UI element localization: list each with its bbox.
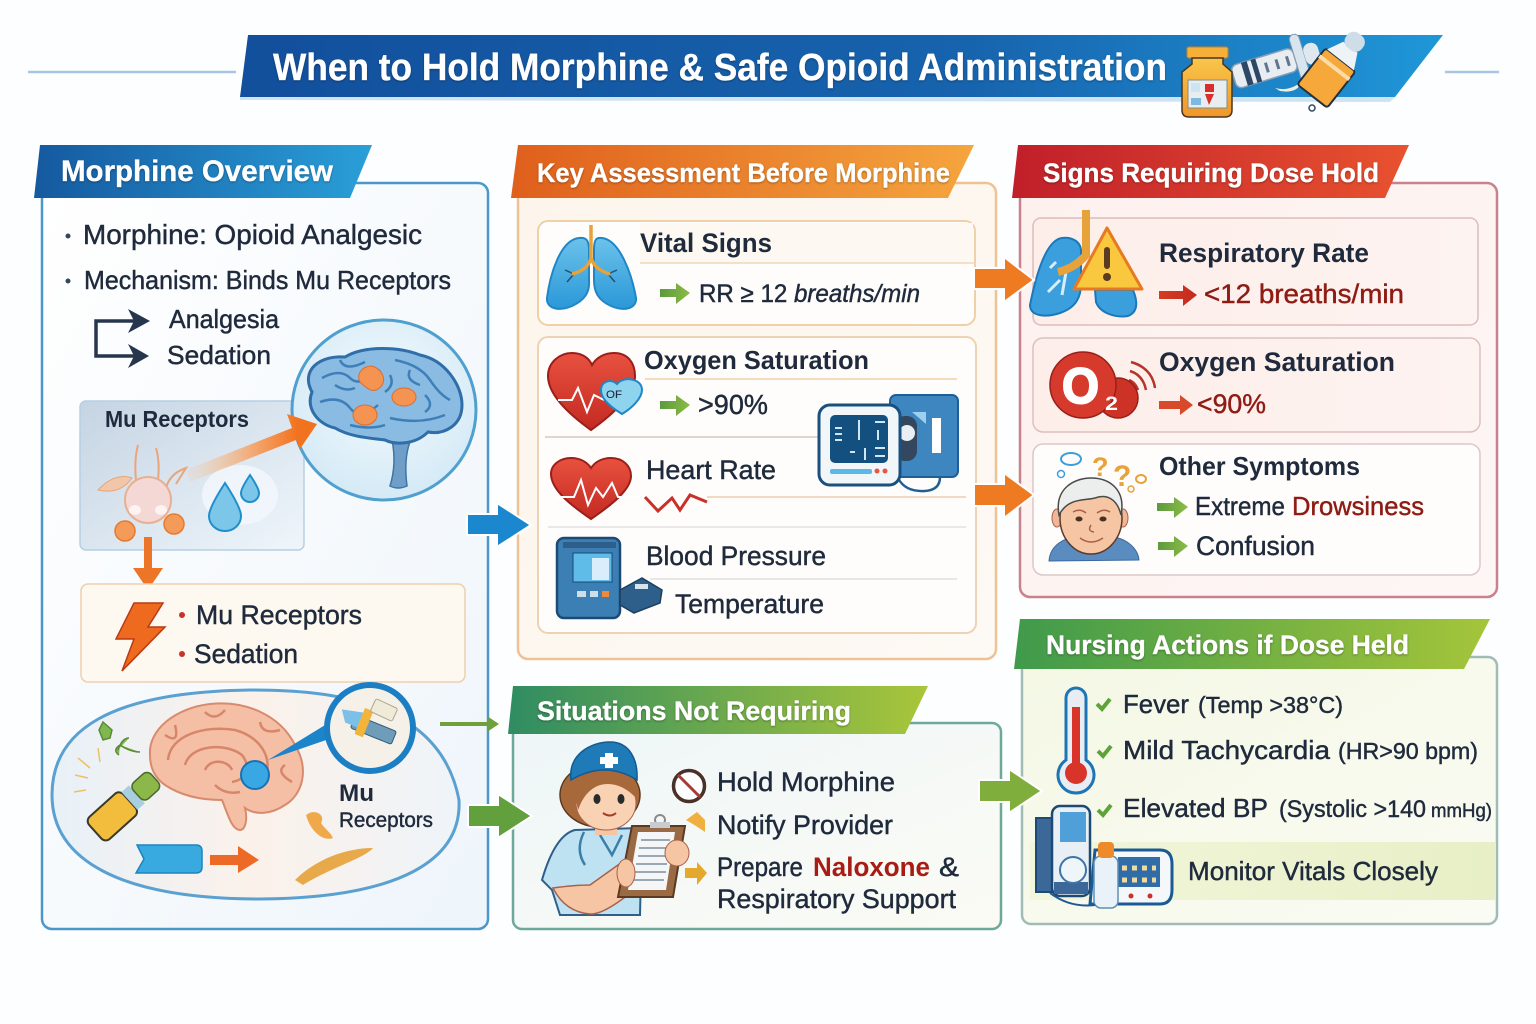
card: respiratory rate	[1030, 210, 1478, 325]
text: held criteria	[1097, 689, 1492, 823]
card: vitals list: Oxygen Saturation	[644, 345, 869, 375]
arrow: overview to situations	[468, 794, 532, 838]
heading: signs requiring dose hold	[1012, 145, 1409, 198]
heading: nursing actions: Nursing Actions if Dose Held	[1046, 630, 1409, 660]
heading: morphine overview	[34, 145, 372, 198]
text: prepare naloxone: Prepare	[717, 852, 803, 882]
card: other symptoms: Confusion	[1196, 531, 1315, 561]
panel: nursing actions	[1014, 619, 1497, 924]
arrow: down to effects	[133, 537, 163, 590]
arrow: green	[660, 283, 690, 304]
arrow: green	[660, 395, 690, 416]
icon: vitals device	[557, 538, 662, 618]
text: effects: Sedation	[167, 340, 271, 370]
icon: callout circle with tools	[327, 685, 413, 771]
title banner	[28, 35, 1499, 102]
panel: signs requiring dose hold	[1012, 145, 1497, 597]
icon: swoosh	[1275, 81, 1302, 92]
icon: yellow arrow	[685, 862, 707, 885]
arrow: green	[1157, 497, 1188, 518]
card: other symptoms: Drowsiness	[1292, 491, 1424, 521]
heading: situations not requiring	[508, 686, 928, 734]
icon: lightning bolt	[116, 603, 165, 671]
icon: pink brain	[150, 703, 303, 830]
icon: orange blob	[306, 812, 333, 839]
icon: monitoring equipment	[1036, 806, 1172, 908]
text: prepare naloxone: Naloxone	[813, 852, 930, 882]
icon: prohibited	[674, 770, 704, 802]
icon: heart with pulse	[551, 458, 640, 519]
icon: O2: O	[1062, 358, 1099, 414]
band: monitor vitals	[1030, 842, 1496, 900]
icon: blue label strip	[136, 845, 202, 873]
icon: pulse zigzag	[645, 495, 707, 511]
arrow: situations to nursing actions	[979, 769, 1042, 813]
card: other symptoms	[1033, 444, 1480, 575]
text: held criteria: Fever	[1123, 689, 1189, 719]
icon: O2	[1050, 352, 1155, 418]
text: held criteria: (Temp >38°C)	[1198, 692, 1343, 718]
icon: blue brain in circle	[292, 320, 476, 500]
heading: situations not requiring: Situations Not Requiring	[537, 696, 851, 726]
icon: blood pressure monitor	[819, 395, 958, 491]
icon: notify diamond	[686, 812, 705, 832]
icon: lungs	[547, 225, 636, 309]
text: held criteria: (Systolic >140	[1279, 796, 1426, 823]
card: vitals list: Temperature	[675, 589, 824, 619]
card: other symptoms: Other Symptoms	[1159, 451, 1360, 481]
card: respiratory rate: <12 breaths/min	[1204, 279, 1404, 309]
card: vital signs: RR ≥ 12 breaths/min	[699, 280, 920, 308]
icon: first arrow head	[128, 309, 150, 333]
heading: nursing actions	[1014, 619, 1490, 669]
icon: thermometer	[1058, 688, 1094, 793]
panel: situations not requiring	[508, 686, 1001, 929]
card: mu receptors and sedation	[81, 584, 465, 682]
panel: morphine overview	[34, 145, 488, 929]
heading: key assessment: Key Assessment Before Morphine	[537, 158, 950, 188]
text: held criteria: Elevated BP	[1123, 793, 1268, 823]
icon: confused elderly patient	[1049, 452, 1146, 561]
text: prepare naloxone: Respiratory Support	[717, 884, 956, 914]
text: effects	[167, 304, 280, 370]
card: mu receptors diagram	[80, 401, 304, 550]
text: overview bullets	[66, 219, 451, 295]
card: other symptoms: Extreme	[1195, 491, 1285, 521]
icon: swoosh	[295, 848, 373, 885]
card: mu receptors and sedation: Sedation	[194, 639, 298, 669]
icon: O2: 2	[1105, 394, 1118, 415]
icon: orange vial	[1297, 23, 1375, 108]
icon: blue dot	[241, 761, 269, 789]
icon: medicine bottle	[1182, 47, 1232, 117]
arrow: red	[1159, 285, 1197, 306]
icon: confused elderly patient: ?	[1113, 460, 1131, 493]
icon: capsule	[74, 748, 165, 843]
panel: nursing actions: Monitor Vitals Closely	[1188, 856, 1438, 886]
icon: confused elderly patient: ?	[1092, 452, 1108, 482]
title text: When to Hold Morphine & Safe Opioid Administration	[273, 47, 1167, 89]
arrow: oval orange	[210, 846, 259, 873]
arrow: vitals to other symptoms	[974, 473, 1034, 518]
card: oxygen saturation: <90%	[1197, 389, 1266, 419]
icon: lungs with warning	[1030, 210, 1142, 316]
card: oxygen saturation: Oxygen Saturation	[1159, 347, 1395, 377]
card: vitals list	[538, 337, 976, 633]
card: mu receptors and sedation: Mu Receptors	[196, 600, 362, 630]
icon: medicine bottle, syringe and vial	[1182, 23, 1375, 117]
text: mu receptors label	[339, 780, 433, 832]
icon: heart with oxygen	[548, 353, 642, 430]
arrow: thin green	[440, 716, 499, 732]
text: mu receptors label: Receptors	[339, 809, 433, 832]
heading: morphine overview: Morphine Overview	[61, 155, 334, 188]
icon: nurse with clipboard	[542, 742, 689, 915]
icon: second arrow head	[128, 344, 149, 368]
icon: callout pointer	[268, 722, 332, 760]
text: prepare naloxone: &	[939, 852, 959, 882]
text: mu receptors label: Mu	[339, 780, 374, 807]
card: vital signs	[538, 221, 975, 325]
arrow: receptor to brain	[186, 414, 317, 482]
card: vitals list: >90%	[698, 389, 768, 420]
text: overview bullets: Mechanism: Binds Mu Receptors	[84, 265, 451, 295]
arrow: vital signs to respiratory rate	[974, 257, 1034, 302]
icon: receptor cell	[98, 445, 186, 541]
card: mu receptors diagram: Mu Receptors	[105, 406, 249, 432]
icon: syringe	[1227, 29, 1326, 101]
text: prepare naloxone	[717, 852, 959, 914]
icon: small ring	[1309, 105, 1315, 111]
card: vitals list: Blood Pressure	[646, 541, 826, 571]
icon: heart with oxygen: OF	[606, 389, 622, 401]
arrow: green	[1158, 536, 1188, 557]
text: overview bullets: Morphine: Opioid Analgesic	[83, 219, 422, 250]
icon: leaves	[99, 722, 140, 755]
icon: branching arrow	[96, 321, 138, 356]
panel: situations not requiring: Notify Provider	[717, 810, 893, 840]
card: vital signs: Vital Signs	[640, 228, 772, 258]
icon: water drops	[202, 465, 278, 531]
card: vitals list: Heart Rate	[646, 455, 776, 485]
text: held criteria: (HR>90 bpm)	[1338, 738, 1478, 764]
text: effects: Analgesia	[169, 304, 280, 334]
card: oxygen saturation	[1033, 338, 1480, 432]
panel: situations not requiring: Hold Morphine	[717, 767, 895, 797]
arrow: red	[1159, 395, 1193, 415]
text: held criteria: mmHg)	[1431, 801, 1492, 822]
card: respiratory rate: Respiratory Rate	[1159, 238, 1369, 268]
panel: key assessment	[511, 145, 996, 659]
arrow: overview to assessment	[467, 503, 531, 547]
heading: signs requiring dose hold: Signs Requiring Dose Hold	[1043, 158, 1379, 188]
text: held criteria: Mild Tachycardia	[1123, 735, 1331, 765]
diagram: brain oval	[52, 685, 459, 899]
heading: key assessment	[511, 145, 974, 198]
